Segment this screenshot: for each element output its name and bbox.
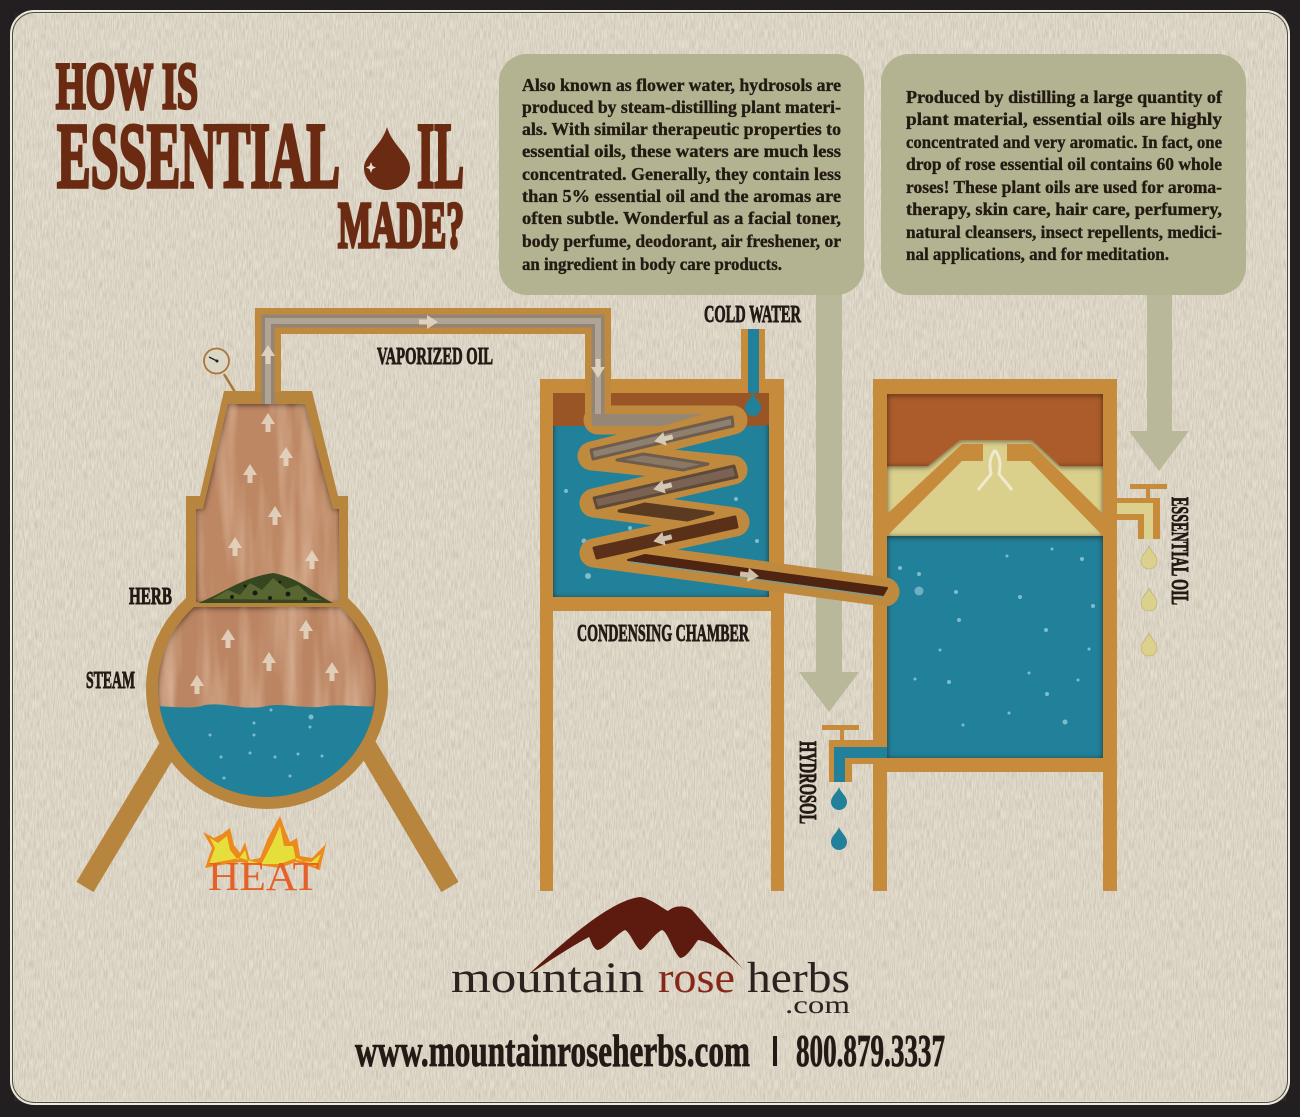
vessel water — [887, 536, 1103, 758]
callout: hydrosols: produced by steam-distilling plant materi- — [522, 97, 841, 117]
label: essential oil: ESSENTIAL OIL — [1166, 497, 1192, 605]
steam and water — [158, 607, 376, 797]
label: vaporized oil: VAPORIZED OIL — [377, 344, 493, 370]
callout: essential oils — [881, 54, 1246, 295]
callout: hydrosols: often subtle. Wonderful as a facial toner, — [522, 208, 841, 228]
callout arrow: hydrosol — [799, 290, 859, 712]
callout arrow: essential oil — [1129, 290, 1189, 471]
label: condensing chamber: CONDENSING CHAMBER — [577, 621, 749, 647]
chamber air space — [553, 393, 769, 426]
coil tubes — [591, 417, 887, 597]
icon: mountain — [528, 897, 747, 975]
vapor pipe and cooling coil — [261, 315, 887, 597]
flame and heat label — [203, 816, 327, 899]
callout: essential oils: therapy, skin care, hair care, perfumery, — [906, 199, 1222, 219]
callout: hydrosols: essential oils, these waters are much less — [522, 141, 841, 161]
logo: mountain rose herbs: mountain — [451, 955, 644, 1002]
still: boiler — [85, 348, 450, 887]
hydrosol tap — [822, 725, 887, 782]
flame and heat label: HEAT — [208, 853, 319, 899]
herb pile — [198, 573, 333, 603]
vapor channel — [268, 321, 598, 420]
callout: hydrosols: als. With similar therapeutic properties to — [522, 119, 841, 139]
support legs — [85, 745, 450, 887]
cold water inlet — [745, 329, 761, 416]
logo: mountain rose herbs: rose — [658, 955, 735, 1002]
receiving vessel — [822, 379, 1167, 891]
pipe casing — [268, 321, 885, 592]
title — [56, 50, 464, 262]
callout: essential oils: Produced by distilling a large quantity of — [906, 87, 1222, 107]
water bubbles — [564, 489, 759, 579]
vessel water bubbles — [898, 548, 1095, 726]
text: IL — [417, 105, 464, 208]
callout: essential oils: nal applications, and for meditation. — [906, 244, 1169, 264]
vapor chamber — [196, 404, 339, 602]
website and phone: 800.879.3337 — [796, 1026, 945, 1076]
title: ESSENTIAL — [57, 105, 340, 208]
essential oil layer — [887, 440, 1103, 536]
callout: essential oils: concentrated and very aromatic. In fact, one — [906, 132, 1222, 152]
label: cold water: COLD WATER — [704, 302, 801, 328]
chamber shell and legs — [540, 329, 784, 891]
callout: hydrosols: body perfume, deodorant, air freshener, or — [522, 231, 841, 251]
callout: essential oils: plant material, essential oils are highly — [906, 109, 1222, 129]
callout: hydrosols: than 5% essential oil and the aromas are — [522, 186, 841, 206]
vessel shell and legs — [873, 379, 1117, 891]
hydrosol drops — [831, 787, 847, 850]
callout: essential oils: drop of rose essential oil contains 60 whole — [906, 154, 1222, 174]
callout: essential oils: roses! These plant oils are used for aroma- — [906, 177, 1222, 197]
brown headspace — [887, 394, 1103, 466]
boiler shell — [146, 391, 388, 809]
flow arrows — [261, 315, 760, 583]
logo: mountain rose herbs: .com — [785, 992, 851, 1019]
callout: essential oils: natural cleansers, insect repellents, medici- — [906, 222, 1222, 242]
callout: hydrosols — [499, 54, 864, 295]
icon: pressure gauge — [204, 348, 241, 402]
label: herb: HERB — [129, 584, 172, 610]
logo: mountain rose herbs: herbs — [747, 955, 850, 1002]
essential oil tap — [1117, 484, 1167, 539]
condensing chamber — [540, 329, 784, 891]
label: hydrosol: HYDROSOL — [794, 741, 820, 824]
title: HOW IS — [56, 50, 198, 123]
logo: mountain rose herbs — [451, 897, 851, 1019]
chamber water — [553, 393, 769, 597]
dome — [887, 444, 1103, 536]
website and phone: www.mountainroseherbs.com — [355, 1026, 750, 1076]
label: steam: STEAM — [86, 668, 135, 694]
title: MADE? — [338, 189, 464, 262]
essential oil drops — [1141, 546, 1157, 656]
steam arrows — [190, 413, 339, 694]
callout: hydrosols: concentrated. Generally, they contain less — [522, 164, 841, 184]
callout: hydrosols: an ingredient in body care products. — [522, 254, 782, 274]
callout: hydrosols: Also known as flower water, hydrosols are — [522, 75, 841, 95]
